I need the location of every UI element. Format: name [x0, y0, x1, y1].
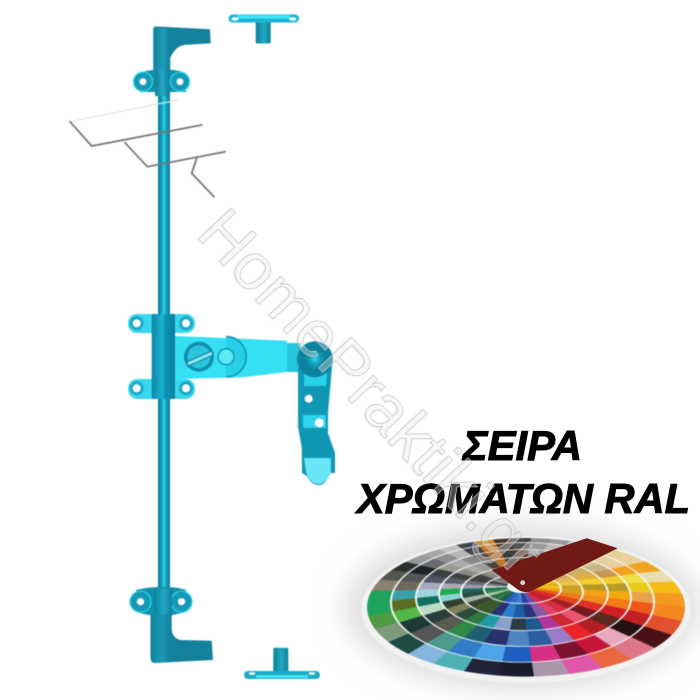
fan shadow [345, 525, 700, 690]
paper edge [361, 536, 691, 683]
ring 1 [485, 575, 560, 603]
top bracket [134, 69, 190, 96]
ring 5 [392, 543, 653, 662]
central block [152, 314, 175, 399]
ring 4 [417, 550, 630, 646]
ring 6 [367, 538, 685, 677]
top pin [228, 14, 299, 44]
bottom pin [244, 648, 320, 679]
bottom hook [150, 614, 213, 663]
handle [297, 341, 335, 485]
ring 3 [440, 558, 607, 630]
heading: RAL colour range: ΣΕΙΡΑ [462, 422, 582, 469]
middle mounting plates [128, 314, 195, 399]
vertical rod [158, 70, 170, 600]
bottom bracket [130, 587, 192, 616]
watermark text: HomePraktiki.gr [185, 194, 559, 588]
fan hub [507, 580, 535, 593]
heading: RAL colour range: ΧΡΩΜΑΤΩΝ RAL [355, 475, 690, 522]
latch arm [175, 336, 301, 379]
ring 2 [462, 567, 582, 617]
watermark logo [70, 100, 225, 197]
top hook [153, 26, 211, 72]
